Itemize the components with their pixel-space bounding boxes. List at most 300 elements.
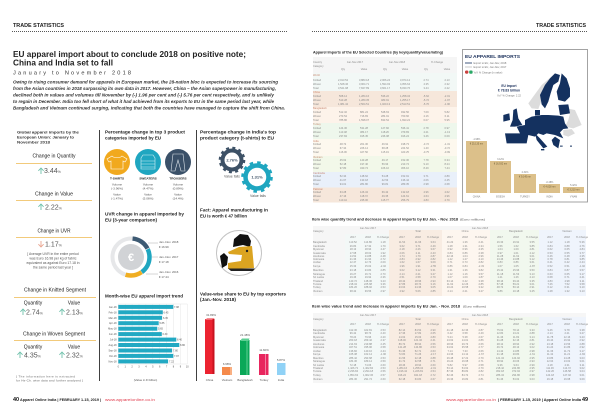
table 2: item wise quantity: 3.85 [529,244,535,248]
table 1: apparel imports by country: 2.32 [444,82,450,86]
table 3: item wise value: 1,284.16 [397,366,407,370]
product figures: TROUSERS [169,176,187,180]
footer left [13,397,155,403]
table 2: item wise quantity: 1.12 [447,272,453,276]
table 1: apparel imports by country: Knitted [313,142,321,146]
map bar labels: 5.42% [570,184,578,187]
table 3: item wise value: 2.66 [478,342,484,346]
x axis: (Value in € billion) [134,378,157,382]
table 1: apparel imports by country: 226.14 [360,146,368,150]
table 3: item wise value: 17.36 [399,332,405,335]
table 3: item wise value: 2.81 [529,339,535,342]
table 3: item wise value: 114.72 [563,366,571,370]
table 3: item wise value: 28.94 [513,342,519,346]
table 3: item wise value: 21.56 [399,356,405,360]
table 1: apparel imports by country: 716.83 [360,114,368,118]
table 2: item wise quantity: 2.93 [430,280,436,282]
table 2: item wise quantity: Tunisia [313,282,321,286]
source note: for Hs-Ch. wise data and further analysed ] [16,378,83,382]
table 1: apparel imports by country: 94.01 [340,183,346,186]
table 1: apparel imports by country: Woven [313,82,321,86]
table 1: apparel imports by country: 4.96 [423,190,429,194]
panel: fact with sewing machine [200,208,268,276]
table 2: item wise quantity: -2.55 [430,265,436,268]
table 3: item wise value: 3.03 [579,356,585,360]
table 2: item wise quantity: 3.36 [380,282,386,286]
table 2: item wise quantity: 2.85 [430,290,436,293]
table 2: item wise quantity: 4.92 [399,290,405,293]
table 2: item wise quantity: 2.48 [380,254,386,258]
product figures: Volume [143,182,153,186]
month labels: Mar-18 [109,317,117,320]
table 3: item wise value: 3.09 [579,378,585,380]
table 3: item wise value: Bangladesh [509,318,523,320]
table 3: item wise value: 2.79 [478,366,484,370]
table 3: item wise value: Jordan [313,350,321,352]
bars [118,305,179,363]
table 1: apparel imports by country: 4,056.64 [400,82,410,86]
table 3: item wise value: 3.33 [529,328,535,332]
icon: trousers [165,149,191,175]
table 2: item wise quantity: 3.67 [430,248,436,251]
table 3: item wise value: 13.21 [513,332,519,335]
bar values: 7.97 [174,355,179,358]
table 1: apparel imports by country: Total [313,198,318,202]
bars [205,318,286,375]
table 1: apparel imports by country: Cambodia [313,172,325,175]
table 3: item wise value: 12.84 [497,332,503,335]
panel: fact with sewing machine: Fact: Apparel manufacturing in [200,208,268,214]
table 1: apparel imports by country: 2.74 [423,78,429,82]
table 3: item wise value: 11.42 [547,353,553,356]
table 1: apparel imports by country: 54.28 [382,175,388,178]
table 1: apparel imports by country: 4.79 [444,198,450,202]
month labels: Aug-18 [108,344,117,347]
table 2: item wise quantity: 27.32 [365,244,371,248]
table 2: item wise quantity: 0.96 [462,248,468,251]
table 1: apparel imports by country: 1,284.16 [359,94,369,98]
table 1: apparel imports by country: 245.06 [360,198,368,202]
table 3: item wise value: 71.26 [415,353,421,356]
table 3: item wise value: 2.87 [478,328,484,332]
table 3: item wise value: 22.18 [415,356,421,360]
panel: India's top product category: Percentage change in India's top [200,130,276,136]
table 2: item wise quantity: 1.31 [462,244,468,248]
table 3: item wise value: 327.51 [349,346,357,349]
table 3: item wise value: 2.86 [478,339,484,342]
product figures: T-SHIRTS [110,176,124,180]
table 1: apparel imports by country: 41.67 [340,179,346,182]
table 2: item wise quantity: 1.07 [447,276,453,279]
table 3: item wise value: 335.96 [364,346,372,349]
table 1: apparel imports by country: -0.72 [444,146,450,150]
header right: TRADE STATISTICS [536,23,587,29]
panel: top 3 product categories [104,130,191,200]
header left: TRADE STATISTICS [13,23,65,29]
table 3: item wise value: 121.34 [496,356,504,360]
table 1: apparel imports by country: Total [313,166,318,170]
panel: month-wise import bar chart [105,294,189,382]
table 1: apparel imports by country: -1.96 [444,102,450,106]
product figures: (14.4%) [173,196,183,200]
table 2: item wise quantity: 218.34 [349,282,357,286]
table 1: apparel imports by country: 8.49 [423,166,429,170]
bar values: 5.65 [158,328,163,331]
table 1: apparel imports by country: 56.93 [382,162,388,166]
month labels: Jun-18 [109,333,117,336]
table 1: apparel imports by country: World [313,74,320,77]
table 3: item wise value: 13.02 [564,360,570,363]
map bar labels: € 16,932 mn [494,162,508,166]
panel: UVR change donut [105,212,184,279]
table 2: item wise quantity: Honduras [313,254,324,258]
panel: top 3 product categories: categories imported by EU [105,136,161,142]
table 3: item wise value: 118.46 [398,339,406,342]
table 3: item wise value: 1,196.42 [397,370,407,373]
table 2: item wise quantity: 3.11 [580,280,584,282]
table 3: item wise value: 184.36 [349,360,357,363]
table 1: apparel imports by country: -5.76 [423,102,429,106]
table 2: item wise quantity: Bangladesh [313,241,327,244]
table 2: item wise quantity: 148.36 [364,280,372,282]
table 1: apparel imports by country: 132.18 [401,190,409,194]
table 3: item wise value: Sri Lanka [313,364,324,366]
table 2: item wise quantity: 3.16 [430,282,436,286]
bar values: 6.35 [163,317,168,320]
table 2: item wise quantity: 3.55 [529,241,535,244]
footer left: 40 [13,397,19,403]
map bar labels: CHINA [473,196,481,198]
table 2: item wise quantity: 0.83 [497,261,503,264]
table 3 title: (Euro millions) [463,304,486,308]
table 3: item wise value: 15.03 [415,336,421,338]
table 3: item wise value: 18.94 [415,364,421,366]
table 3: item wise value: 84.52 [415,328,421,332]
table 2: item wise quantity: 1.05 [513,265,519,268]
table 3: item wise value: 53.14 [447,366,453,370]
table 3: item wise value: 3.02 [579,366,585,370]
table 1: apparel imports by country: 4.96 [444,194,450,198]
table 3: item wise value: 16.36 [447,378,453,380]
table 3: item wise value: 31.28 [497,339,503,342]
bar values: 7.98 [174,306,179,309]
change in UVR [16,228,92,270]
table 2: item wise quantity: 3.77 [579,252,585,254]
table 2: item wise quantity: 7.52 [564,282,570,286]
table 3: item wise value: 5.82 [447,364,453,366]
table 2: item wise quantity: Indonesia [313,258,324,260]
table 3: item wise value: 40.06 [513,360,519,363]
table 3: item wise value: 2.92 [529,342,535,346]
table 1: apparel imports by country: Knitted [313,78,321,82]
table 1: apparel imports by country: 2,564.51 [359,102,369,106]
table 2: item wise quantity: 1.09 [462,276,468,279]
map title: EU APPAREL IMPORTS [465,54,520,59]
table 3: item wise value: 1,462.84 [363,366,373,370]
table 3: item wise value: 2.40 [380,332,386,335]
table 2: item wise quantity: 1.91 [415,265,421,268]
product figures [110,176,187,200]
table 3: item wise value: 2.60 [380,378,386,380]
table 2: item wise quantity: 0.84 [462,265,468,268]
table 3: item wise value: 3.17 [579,350,585,352]
table 3: item wise value: 28.96 [447,342,453,346]
table 3: item wise value: 3.38 [579,328,585,332]
table 3: item wise value: 2.81 [478,378,484,380]
table 1: apparel imports by country: 289.35 [401,183,409,186]
table 3: item wise value: 263.18 [349,339,357,342]
table 1: apparel imports by country: 915.45 [360,134,368,138]
table 1: apparel imports by country: 148.62 [360,175,368,178]
map legend [465,61,507,74]
table 3: item wise value: 2.56 [380,370,386,373]
table 2: item wise quantity: 0.84 [547,244,553,248]
table 2: item wise quantity: 2.06 [399,252,405,254]
table 3: item wise value: China [462,318,468,320]
left panel: global apparel imports [14,130,96,382]
donut labels: € 16.99 [159,245,169,249]
table 2: item wise quantity: 10.24 [447,286,453,289]
icon: gear quantity: 2.76% [226,158,238,162]
table 3: item wise value: 26.48 [447,356,453,360]
table 3: item wise value: Nicaragua [313,360,325,363]
table 1: apparel imports by country: 115.77 [381,198,389,202]
table 2: item wise quantity: 1.67 [415,261,421,264]
table 2: item wise quantity: 9.86 [497,290,503,293]
table 3: item wise value: 34.62 [447,346,453,349]
table 2: item wise quantity: 2.97 [380,290,386,293]
table 2: item wise quantity: 13.88 [513,258,519,260]
table 3: item wise value: 2,236.84 [348,370,358,373]
table 3: item wise value: -1.84 [579,353,585,356]
table 3: item wise value: 941.18 [414,374,422,376]
table 3: item wise value: 2018 [462,322,468,326]
change in knitted segment: Value [68,300,80,306]
table 3: item wise value: 124.18 [546,374,554,376]
table 2: item wise quantity: 1.27 [462,258,468,260]
table 2: item wise quantity: 2.14 [399,272,405,276]
table 3: item wise value: Thailand [313,366,323,370]
table 3: item wise value: 51.36 [399,350,405,352]
table 2: item wise quantity: 38.42 [350,290,356,293]
table 3: item wise value: 140.16 [364,350,372,352]
table 3: item wise value: 11.78 [547,336,553,338]
bar values: 7.22 [169,360,174,363]
table 3: item wise value: 32.16 [513,339,519,342]
map bar labels: € 4,628 mn [544,186,556,188]
table 3: item wise value: 142.26 [546,370,554,373]
icon: gear value: Value falls [250,194,266,198]
table 3: item wise value: 2.58 [380,346,386,349]
table 2: item wise quantity: 1.36 [462,269,468,272]
table 3: item wise value: 2.20 [380,336,386,338]
table 2: item wise quantity: 1.92 [380,252,386,254]
table 2: item wise quantity: 2018 [513,236,519,238]
table 3: item wise value: 2.14 [547,332,553,335]
table 2: item wise quantity: 1.18 [564,241,570,244]
table 3: item wise value: 2,294.18 [363,370,373,373]
table 3: item wise value: 124.92 [512,356,520,360]
table 3: item wise value: 11.72 [564,350,570,352]
x axis: 6 [159,366,161,368]
table 3: item wise value: 2.80 [430,336,436,338]
table 3: item wise value: 42.36 [462,328,468,332]
bar labels: Bangladesh [237,378,253,382]
table 3: item wise value: 9.46 [547,328,553,332]
table 1: apparel imports by country: 5.82 [444,110,450,114]
title: EU apparel import about to conclude 2018 on positive note; [13,49,246,59]
table 3: item wise value: 21.18 [497,353,503,356]
table 1: apparel imports by country: 785.86 [339,118,347,122]
table 2: item wise quantity: 3.57 [579,269,585,272]
map legend: Export to EU, Jan-Nov, 2017 [474,65,507,69]
table 1: apparel imports by country: 2.78 [423,126,429,130]
table 2: item wise quantity: 0.63 [547,272,553,276]
bar labels: Turkey [260,378,269,382]
table 3: item wise value: 2018 [513,322,519,326]
table 2: item wise quantity: 1.56 [497,244,503,248]
table 3: item wise value: 146.58 [563,370,571,373]
table 2: item wise quantity: 3.58 [579,282,585,286]
table 2: item wise quantity: Vietnam [562,230,572,233]
table 2: item wise quantity: 2.85 [380,269,386,272]
table 3: item wise value: 218.42 [496,366,504,370]
product figures: Value [144,192,152,196]
table 1: apparel imports by country: 2.22 [444,86,450,90]
table 3: item wise value: 2.71 [478,360,484,363]
table 3: item wise value: 3.14 [529,336,535,338]
table 2: item wise quantity: 1.21 [497,276,503,279]
table 2: item wise quantity: 2.72 [380,258,386,260]
product figures: Value [113,192,121,196]
table 1: apparel imports by country: 96.81 [382,183,388,186]
table 3: item wise value: Category [313,318,324,320]
table 2: item wise quantity: 0.65 [564,272,570,276]
table 2: item wise quantity: 0.97 [497,252,503,254]
table 1: apparel imports by country: Bangladesh [313,107,327,110]
table 3: item wise value: 13.18 [547,342,553,346]
table 2: item wise quantity: 4.35 [579,254,585,258]
table 3: item wise value: 412.36 [349,328,357,332]
table 3: item wise value: 2.93 [529,360,535,363]
change in woven segment [14,332,96,360]
table 2: item wise quantity: 4.98 [564,280,570,282]
table 2: item wise quantity: 1.32 [564,290,570,293]
table 3: item wise value: Jan-Nov 2017 [360,314,376,317]
table 2: item wise quantity: 0.86 [447,265,453,268]
table 2: item wise quantity: 4.47 [380,248,386,251]
table 2: item wise quantity: 15.42 [497,269,503,272]
map legend: YoY % Change (in value) [474,70,502,74]
table 2: item wise quantity: 0.88 [564,244,570,248]
donut labels: € 17.44 [159,275,169,279]
table 3: item wise value: 29.73 [462,342,468,346]
table 2: item wise quantity: 2.21 [462,290,468,293]
table 3: item wise value: Guatemala [313,339,326,342]
table 2: item wise quantity: 4.35 [478,248,484,251]
table 3: item wise value: Vietnam [562,318,572,320]
product figures: (0.89%) [173,186,183,190]
table 2: item wise quantity: 0.68 [547,276,553,279]
intro paragraph: to regain in December. India too fell short of what it had achieved from its exports to EU in the same period last year, while [13,99,275,104]
x axis: 7 [166,366,168,368]
bar values: 6.30 [162,333,168,336]
table 2: item wise quantity: 3.62 [399,244,405,248]
table 3: item wise value: % Change [576,322,588,326]
table 2: item wise quantity: 2.09 [380,261,386,264]
table 3: item wise value: 3.11 [580,364,584,366]
table 2: item wise quantity: 1.96 [399,265,405,268]
table 3: item wise value: 2.59 [380,360,386,363]
table 1: apparel imports by country: 9.10 [423,162,429,166]
icon: gear value: 1.31% [251,174,263,180]
table 1: apparel imports by country: 833.54 [381,118,389,122]
table 1: apparel imports by country: 152.36 [401,158,409,162]
map callout: € 78.83 billion [498,88,520,92]
table 2: item wise quantity: 2.96 [478,254,484,258]
table 3: item wise value: 3.01 [579,374,585,376]
table 3: item wise value: Total [415,318,421,320]
table 1: apparel imports by country: 4.16 [423,114,429,118]
x axis [118,366,189,382]
table 3: item wise value: 127.92 [563,374,571,376]
table 1: apparel imports by country: 143.28 [360,158,368,162]
table 3: item wise value: 141.28 [398,346,406,349]
table 2: item wise quantity: 1.04 [497,248,503,251]
table 1: apparel imports by country: 124.61 [401,194,409,198]
table 1: apparel imports by country: -5.62 [423,94,429,98]
table 3: item wise value: 21.86 [564,346,570,349]
table 3: item wise value: % Change [475,322,487,326]
footer left: www.apparelonline.co.in [105,397,155,402]
table 2: item wise quantity: 4.83 [547,280,553,282]
table 3: item wise value: 16.44 [547,339,553,342]
table 3: item wise value: 48.13 [513,346,519,349]
table 2 title: Item wise quantity trend and decrease in apparel imports by EU Jan. - Nov. 2018 [312,216,459,222]
table 2: item wise quantity: 3.23 [380,280,386,282]
table 2: item wise quantity: % Change [377,236,389,238]
table 3: item wise value: 16.92 [564,339,570,342]
table 2: item wise quantity: 2.84 [399,258,405,260]
change in UVR: was Euro 16.98 per kg of fabric [30,256,77,260]
table 3: item wise value: 2.99 [529,364,535,366]
table 2: item wise quantity: Vietnam [313,290,322,293]
table 3: item wise value: 2.63 [430,350,436,352]
table 2: item wise quantity: 3.82 [478,269,484,272]
table 2: item wise quantity: 26.84 [350,244,356,248]
table 1: apparel imports by country: 224.52 [401,146,409,150]
table 2: item wise quantity: Cambodia [313,244,325,248]
month labels: Sep-18 [108,350,117,352]
table 2: item wise quantity: 2.49 [430,244,436,248]
table 1: apparel imports by country: 536.41 [401,126,409,130]
table 1: apparel imports by country: Value [402,68,408,71]
table 3: item wise value: Myanmar [313,336,324,338]
table 2: item wise quantity: 225.68 [364,282,372,286]
panel: India's top product category [200,130,276,198]
subtitle: January to November 2018 [13,70,131,76]
table 1: apparel imports by country: India [313,140,319,142]
table 2: item wise quantity: 1.87 [478,276,484,279]
month labels: Jan-18 [109,306,117,309]
table 1: apparel imports by country: 3,964.71 [359,82,369,86]
table 1: apparel imports by country: 118.26 [381,130,389,134]
table 2: item wise quantity: Mauritius [313,269,324,272]
product figures: Volume [173,182,183,186]
table 2: item wise quantity: 13.46 [497,258,503,260]
bar values: 6.45 [164,311,169,314]
table 1: apparel imports by country: 2.89 [444,175,450,178]
